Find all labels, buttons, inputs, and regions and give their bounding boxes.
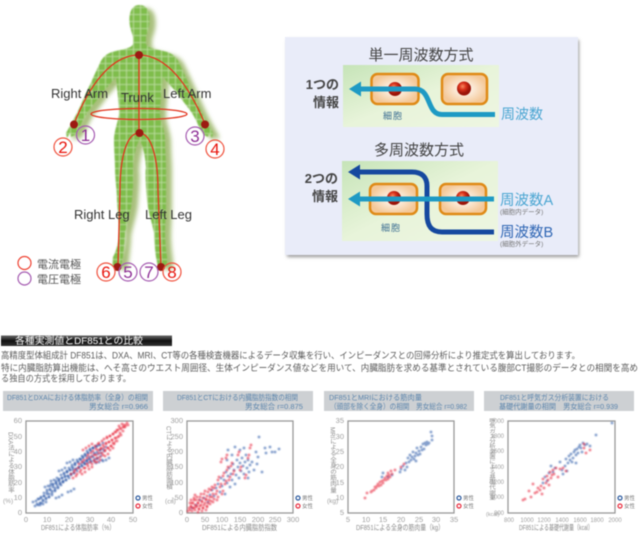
scatter chart 3 — [327, 416, 475, 532]
icon: green body figure — [66, 5, 213, 267]
scatter chart 1: 40 — [107, 515, 115, 524]
scatter chart 4: (kcal) — [486, 512, 500, 518]
scatter chart 3: 35 — [450, 515, 458, 524]
label: frequency B: (細胞外データ) — [500, 239, 543, 248]
legend: electrodes: 電圧電極 — [37, 272, 81, 286]
scatter chart 2: 50 — [201, 515, 209, 524]
scatter chart 1: 男性 — [142, 494, 154, 502]
electrode markers — [54, 126, 224, 281]
scatter chart 2: 女性 — [302, 502, 314, 510]
text block: description: る独自の方式を採用しております。 — [1, 372, 131, 384]
scatter chart 2: 100 — [216, 515, 228, 524]
scatter chart 1: 20 — [14, 478, 22, 487]
scatter chart 4: 800 — [504, 518, 515, 524]
scatter chart 2: DF851による内臓脂肪指数 — [202, 522, 277, 532]
label: frequency B: 周波数B — [500, 224, 553, 241]
scatter chart 1 — [3, 416, 154, 532]
scatter chart 3: 25 — [415, 515, 423, 524]
scatter chart 2: 250 — [170, 432, 183, 441]
panel shadow — [287, 40, 579, 257]
scatter chart 2: 200 — [252, 515, 264, 524]
diagram: single frequency — [343, 65, 499, 127]
electrode numbers — [58, 126, 220, 282]
panel: body diagram — [18, 5, 224, 286]
label: Trunk: Trunk — [121, 90, 154, 105]
chart 1 header — [3, 391, 153, 411]
chart 3 header: （頭部を除く全身）の相関 男女総合 r=0.982 — [330, 401, 467, 411]
scatter chart 3: 20 — [397, 515, 405, 524]
label: one information: 情報 — [313, 95, 339, 110]
label: frequency A — [500, 192, 553, 216]
current paths — [74, 55, 205, 267]
scatter chart 4: 800 — [494, 511, 505, 517]
scatter chart 1: 50 — [129, 515, 137, 524]
scatter chart 4: 呼気ガス分析装置による基礎代謝量 — [488, 417, 496, 500]
scatter chart 2: 150 — [170, 462, 183, 471]
scatter chart 2: 男性 — [302, 494, 314, 502]
section heading bar — [1, 335, 172, 347]
scatter chart 3: 5 — [340, 508, 344, 517]
scatter chart 1: DF851による体脂肪率（%） — [41, 522, 115, 532]
electrode numbers: 4 — [210, 140, 220, 159]
scatter chart 2: 150 — [234, 515, 246, 524]
chart 2 header: 男女総合 r=0.875 — [245, 401, 303, 411]
chart 4 header: 基礎代謝量の相関 男女総合 r=0.939 — [499, 401, 618, 411]
chart 1 header: 男女総合 r=0.966 — [89, 401, 148, 411]
electrode numbers: 1 — [81, 126, 90, 145]
scatter chart 2 — [164, 416, 314, 532]
scatter chart 3: (kg) — [327, 498, 338, 505]
icon: body shadow — [72, 8, 219, 270]
scatter chart 2: 300 — [287, 515, 299, 524]
label: frequency B — [500, 224, 553, 248]
scatter chart 3: DF851による全身の筋肉量（kg） — [356, 522, 444, 532]
scatter chart 3: 20 — [336, 462, 344, 471]
scatter chart 4 — [486, 417, 636, 532]
scatter chart 4: 1000 — [491, 495, 505, 501]
scatter chart 1: 30 — [86, 515, 94, 524]
scatter chart 4: 1800 — [590, 518, 604, 524]
scatter chart 1: 30 — [14, 462, 22, 471]
scatter chart 4: 1600 — [573, 518, 587, 524]
chart 2 header: DF851とCTにおける内臓脂肪指数の相関 — [177, 392, 298, 402]
label: frequency: 周波数 — [501, 106, 543, 122]
measurement nodes — [70, 51, 209, 271]
diagram: multi frequency — [342, 161, 498, 241]
electrode numbers: 7 — [144, 263, 154, 282]
scatter chart 2: 300 — [170, 416, 183, 425]
scatter chart 3: 15 — [336, 478, 344, 487]
scatter chart 2: 0 — [185, 515, 189, 524]
scatter chart 1: 10 — [43, 515, 51, 524]
electrode numbers: 2 — [58, 138, 68, 157]
legend: electrodes — [18, 256, 81, 286]
diagram: single frequency: 細胞 — [383, 110, 403, 121]
scatter chart 1: 20 — [65, 515, 73, 524]
scatter chart 3: 30 — [432, 515, 440, 524]
chart 1 header: DF851とDXAにおける体脂肪率（全身）の相関 — [7, 392, 148, 402]
scatter chart 3: MRIによる全身の筋肉量 — [328, 427, 337, 493]
label: two information — [305, 171, 338, 204]
electrode numbers: 3 — [190, 127, 200, 146]
chart 4 header — [484, 391, 634, 411]
scatter chart 1: (%) — [3, 498, 13, 505]
scatter chart 2: 100 — [170, 478, 183, 487]
scatter chart 2: 250 — [269, 515, 281, 524]
scatter chart 4: 男性 — [624, 494, 636, 502]
scatter chart 3: 10 — [362, 515, 370, 524]
scatter chart 1: 女性 — [142, 502, 154, 510]
scatter chart 1: DXA法による体脂肪率 — [6, 432, 15, 494]
scatter chart 4: 2000 — [491, 419, 505, 425]
scatter chart 3: 25 — [336, 447, 344, 456]
panel background — [285, 37, 578, 255]
scatter chart 4: 1400 — [491, 465, 505, 471]
scatter chart 4: 1000 — [520, 518, 534, 524]
label: Right Leg: Right Leg — [74, 207, 130, 222]
heading: single frequency: 単一周波数方式 — [368, 47, 474, 64]
label: Right Arm: Right Arm — [51, 86, 108, 101]
text block: description — [1, 350, 638, 384]
scatter chart 1: 50 — [14, 432, 22, 441]
label: Left Arm: Left Arm — [163, 86, 211, 101]
scatter chart 3: 30 — [336, 432, 344, 441]
electrode numbers: 5 — [123, 263, 133, 282]
chart 2 header — [163, 391, 313, 411]
scatter chart 4: 女性 — [624, 502, 636, 510]
scatter chart 2: 200 — [170, 447, 183, 456]
label: one information — [306, 77, 339, 110]
scatter chart 3: 35 — [336, 416, 344, 425]
scatter chart 4: 2000 — [608, 518, 622, 524]
scatter chart 1: 10 — [14, 493, 22, 502]
scatter chart 4: 1400 — [555, 518, 569, 524]
chart 3 header — [324, 391, 474, 411]
scatter chart 2: CTによる内臓脂肪面積 — [164, 426, 173, 491]
heading: multi frequency: 多周波数方式 — [374, 141, 464, 159]
scatter chart 3: 女性 — [463, 502, 475, 510]
chart 4 header: DF851と呼気ガス分析装置における — [500, 392, 609, 402]
label: two information: 情報 — [312, 189, 338, 204]
scatter chart 4: 1200 — [491, 480, 505, 486]
scatter chart 3: 15 — [379, 515, 387, 524]
electrode numbers: 8 — [167, 263, 177, 282]
label: two information: 2つの — [305, 171, 338, 186]
scatter chart 4: DF851による基礎代謝量（kcal） — [519, 522, 593, 532]
label: Left Leg: Left Leg — [145, 207, 192, 222]
text block: description: 高精度型体組成計 DF851は、DXA、MRI、CT等の各種検査機器によるデータ収集を行い、インピーダンスとの回帰分析により推定式を算出しております。 — [1, 350, 580, 360]
scatter chart 1: 0 — [24, 515, 28, 524]
scatter chart 1: 0 — [18, 508, 22, 517]
scatter chart 4: 1800 — [491, 434, 505, 440]
scatter chart 2: (㎠) — [165, 496, 176, 505]
scatter chart 4: 1200 — [537, 518, 551, 524]
section heading bar: 各種実測値とDF851との比較 — [15, 335, 144, 347]
electrode numbers: 6 — [101, 263, 111, 282]
chart 3 header: DF851とMRIにおける筋肉量 — [329, 392, 422, 402]
scatter chart 2: 50 — [175, 493, 183, 502]
scatter chart 3: 5 — [346, 515, 350, 524]
label: frequency A: (細胞内データ) — [500, 207, 543, 216]
scatter chart 3: 10 — [336, 493, 344, 502]
panel: frequency methods — [285, 37, 579, 257]
legend: electrodes: 電流電極 — [37, 257, 81, 271]
label: one information: 1つの — [306, 77, 339, 92]
diagram: multi frequency: 細胞 — [381, 222, 401, 233]
scatter chart 3: 男性 — [463, 494, 475, 502]
label: frequency A: 周波数A — [500, 192, 553, 209]
scatter chart 2: 0 — [179, 508, 183, 517]
scatter chart 1: 40 — [14, 447, 22, 456]
scatter chart 1: 60 — [14, 416, 22, 425]
scatter chart 4: 1600 — [491, 449, 505, 455]
